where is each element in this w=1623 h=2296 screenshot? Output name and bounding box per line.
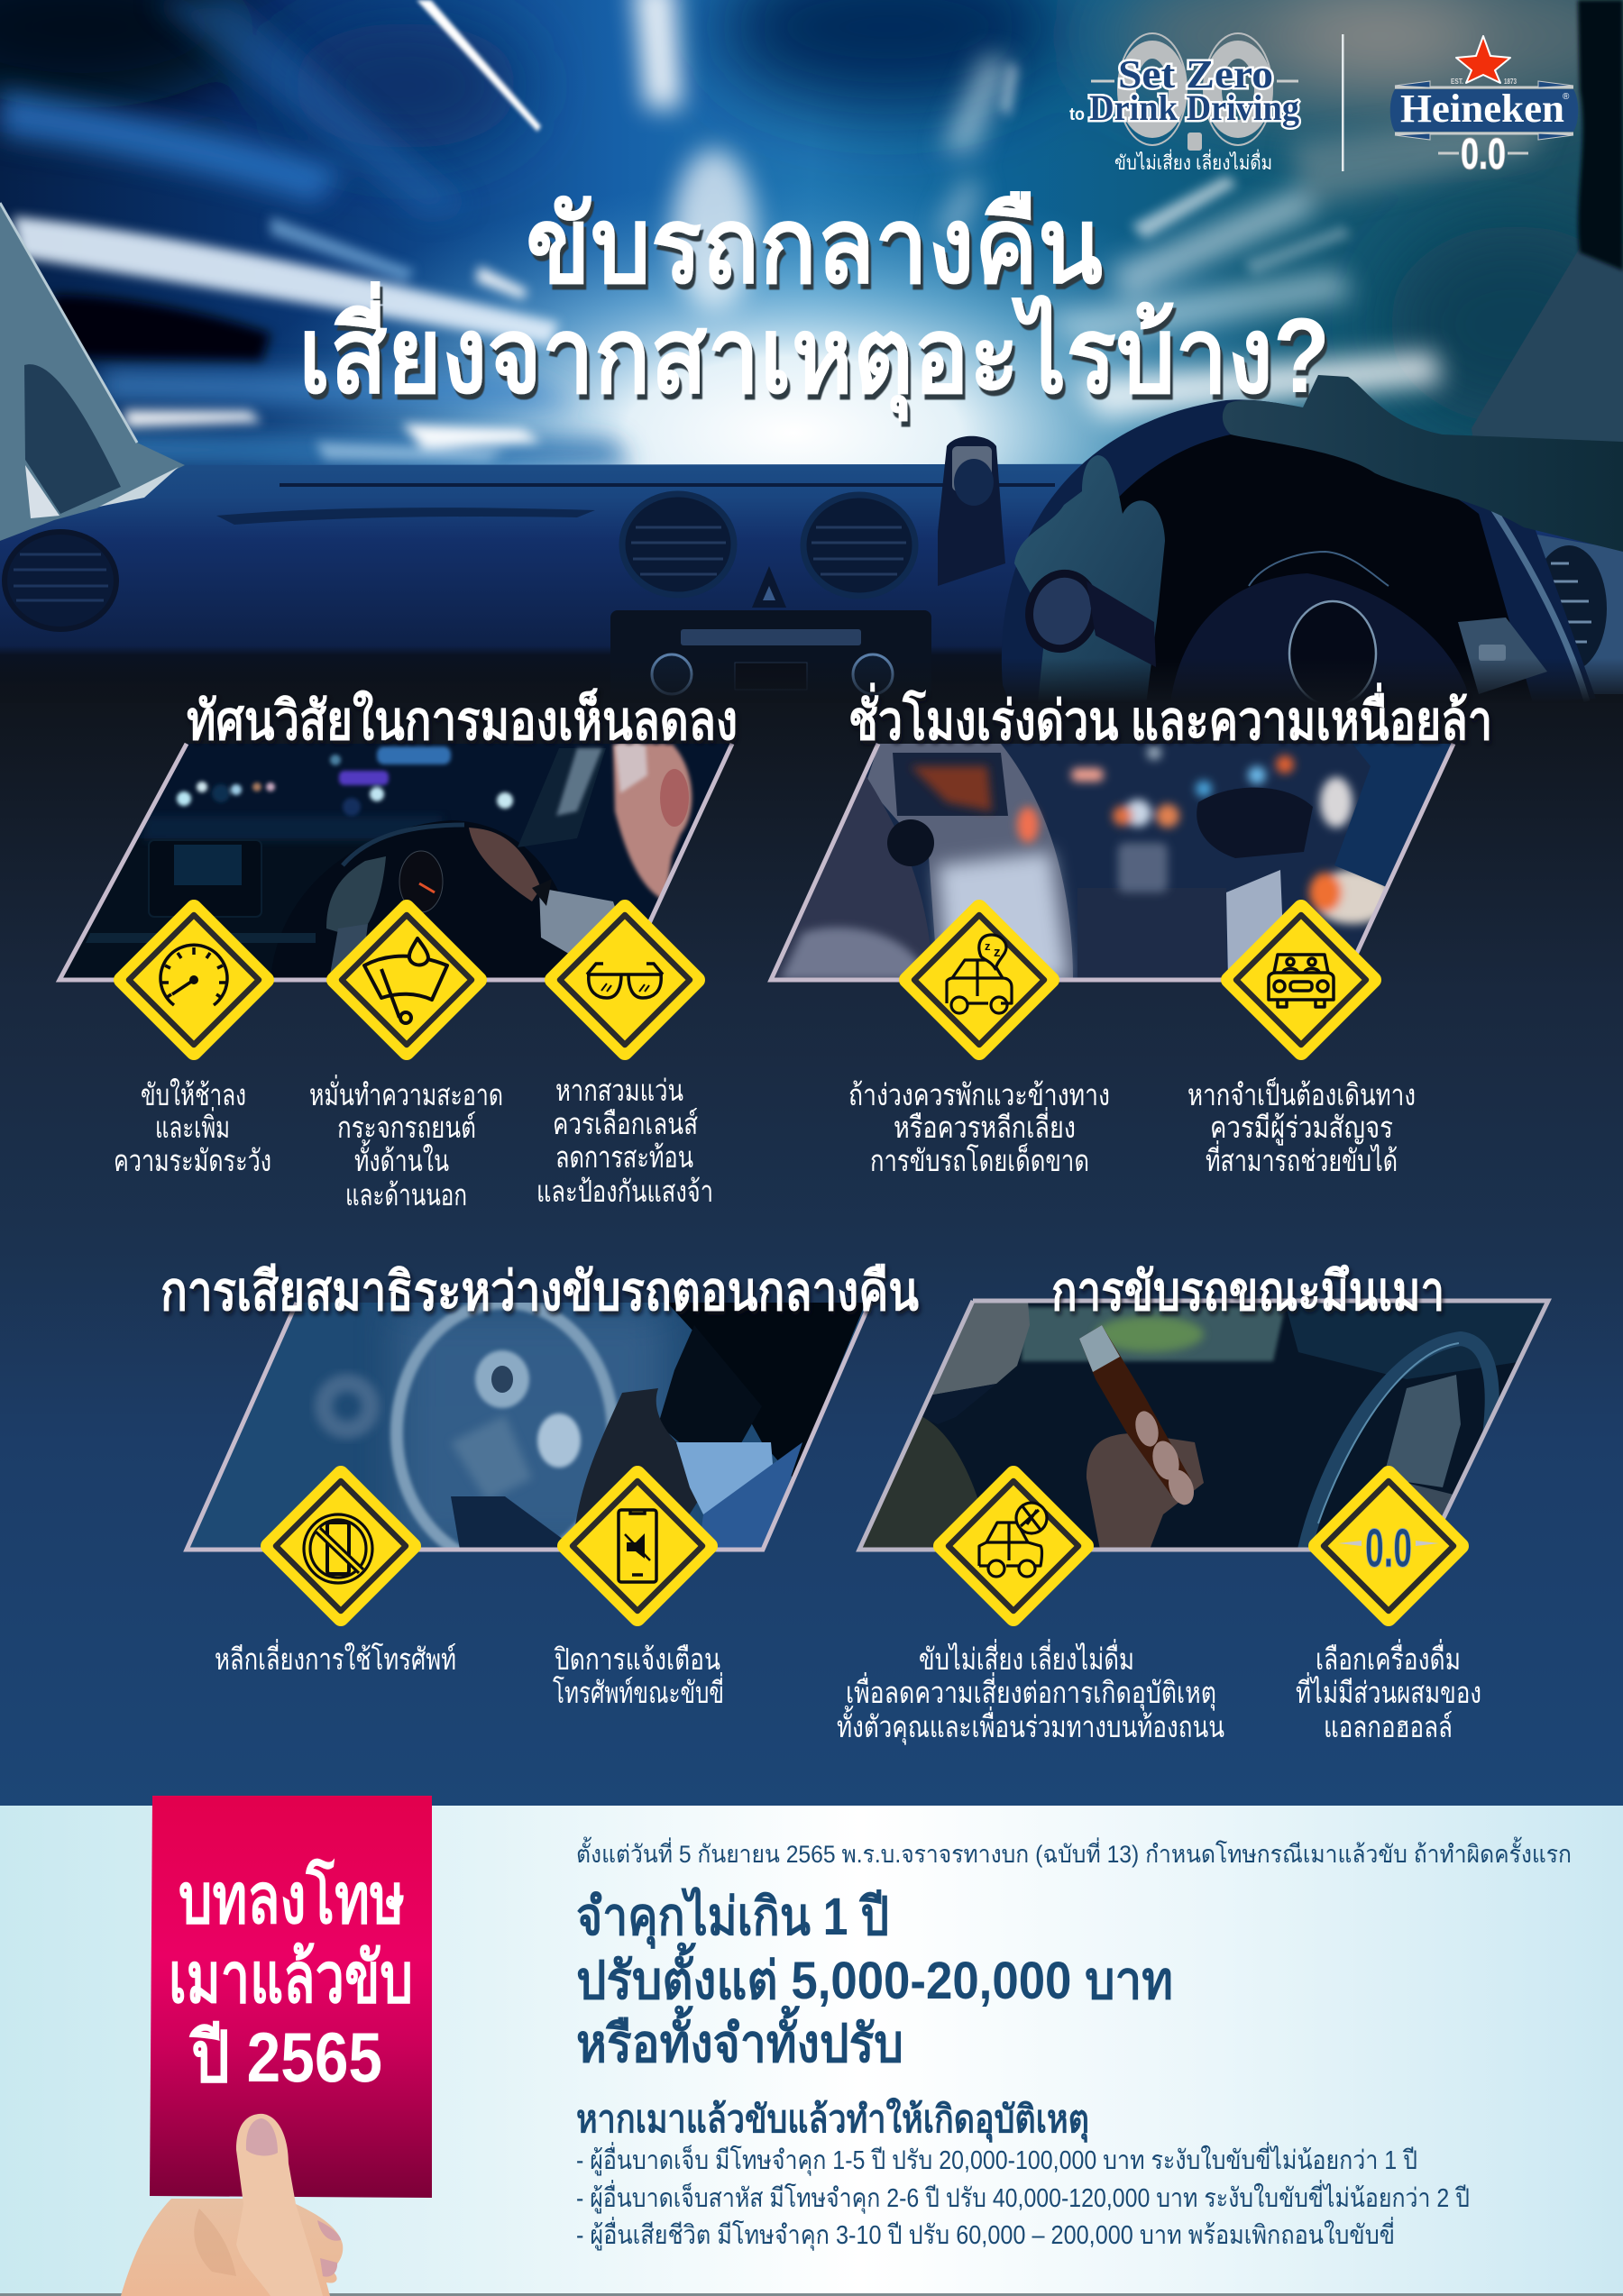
panel 4 photo: drunk driving — [859, 1301, 1548, 1550]
captions: rest: ถ้าง่วงควรพักแวะข้างทาง — [848, 1078, 1110, 1111]
panel 2 photo: rush hour traffic — [771, 744, 1453, 983]
main title: เสี่ยงจากสาเหตุอะไรบ้าง? — [298, 281, 1330, 422]
accident penalties list: - ผู้อื่นบาดเจ็บสาหัส มีโทษจำคุก 2-6 ปี ปรับ 40,000-120,000 บาท ระงับใบขับขี่ไม่น้อยกว่า 2 ปี — [576, 2180, 1470, 2214]
penalty card: บทลงโทษ — [179, 1857, 405, 1938]
logo divider — [1342, 34, 1343, 171]
captions: rest — [848, 1078, 1110, 1177]
captions: wiper — [309, 1075, 503, 1212]
accident penalties list — [576, 2142, 1470, 2251]
hazard button — [752, 566, 786, 608]
logo: Set Zero to Drink Driving: Set Zero — [1118, 52, 1273, 96]
section heading: distraction: การเสียสมาธิระหว่างขับรถตอนกลางคืน — [160, 1261, 919, 1322]
captions: zero alcohol: ที่ไม่มีส่วนผสมของ — [1296, 1672, 1481, 1709]
captions: silence notifications — [553, 1642, 724, 1709]
captions: wiper: ทั้งด้านใน — [354, 1139, 449, 1177]
icon: no phone sign — [269, 1474, 413, 1618]
captions: zero alcohol: แอลกอฮอลล์ — [1324, 1710, 1453, 1743]
icon: glasses sign — [553, 908, 697, 1052]
panel 1 photo: reduced visibility — [54, 744, 732, 983]
left A-pillar — [0, 203, 185, 541]
air vents — [5, 532, 116, 629]
logo: Set Zero to Drink Driving: Drink Driving — [1089, 87, 1299, 128]
icon: sleepy car sign — [907, 908, 1051, 1052]
captions: don't drink: ขับไม่เสี่ยง เลี่ยงไม่ดื่ม — [919, 1639, 1134, 1676]
logo: Heineken 0.0: Heineken — [1400, 87, 1564, 131]
icon: sleepy car sign: z — [994, 945, 1001, 960]
captions: rest: การขับรถโดยเด็ดขาด — [870, 1143, 1089, 1177]
main penalties — [576, 1887, 1173, 2073]
section heading: drunk driving: การขับรถขณะมึนเมา — [1051, 1261, 1444, 1322]
penalty card: ปี 2565 — [188, 2017, 382, 2097]
captions: passenger: ที่สามารถช่วยขับได้ — [1206, 1140, 1398, 1177]
driver's left hand with watch — [1014, 455, 1165, 712]
caption: avoid phone: หลีกเลี่ยงการใช้โทรศัพท์ — [215, 1639, 456, 1676]
logo: Heineken 0.0: 0.0 — [1461, 131, 1506, 178]
captions: rest: หรือควรหลีกเลี่ยง — [894, 1107, 1076, 1144]
captions: silence notifications: โทรศัพท์ขณะขับขี่ — [553, 1672, 724, 1709]
steering wheel — [1002, 399, 1596, 703]
icon: 0.0 sign: 0.0 — [1365, 1518, 1412, 1578]
captions: glasses: และป้องกันแสงจ้า — [536, 1175, 713, 1208]
dashboard — [0, 463, 1597, 666]
icon: car with passengers sign — [1229, 908, 1373, 1052]
logo: Set Zero to Drink Driving — [1069, 33, 1299, 174]
panel 3 photo: phone while driving — [187, 1303, 870, 1564]
captions: don't drink: เพื่อลดความเสี่ยงต่อการเกิดอุบัติเหตุ — [846, 1672, 1216, 1711]
captions: wiper: และด้านนอก — [345, 1178, 467, 1212]
section heading: rush hour: ชั่วโมงเร่งด่วน และความเหนื่อยล้า — [848, 682, 1492, 751]
phone holder — [938, 436, 1005, 586]
captions: speed: ความระมัดระวัง — [114, 1144, 271, 1177]
logo: Heineken 0.0: ® — [1563, 92, 1570, 102]
hero photo: night road through windshield — [0, 0, 1623, 712]
right dash and vent — [1536, 535, 1623, 694]
logo: Heineken 0.0: EST. — [1451, 78, 1463, 86]
captions: glasses: หากสวมแว่น — [555, 1074, 683, 1107]
logo: Set Zero to Drink Driving: to — [1069, 105, 1085, 124]
icon: windshield wiper sign — [335, 908, 479, 1052]
captions: wiper: หมั่นทำความสะอาด — [309, 1075, 503, 1111]
hand holding card — [121, 2114, 343, 2296]
icon: sleepy car sign: z — [985, 939, 991, 953]
main penalties: ปรับตั้งแต่ 5,000-20,000 บาท — [576, 1943, 1173, 2010]
captions: don't drink: ทั้งตัวคุณและเพื่อนร่วมทางบนท้องถนน — [837, 1706, 1224, 1745]
captions: glasses — [536, 1074, 713, 1208]
main penalties: จำคุกไม่เกิน 1 ปี — [576, 1887, 889, 1950]
captions: glasses: ควรเลือกเลนส์ — [553, 1107, 698, 1140]
section heading: visibility: ทัศนวิสัยในการมองเห็นลดลง — [187, 688, 738, 751]
icon: muted phone sign — [565, 1474, 710, 1618]
icon: speedometer sign — [122, 908, 266, 1052]
logo: Heineken 0.0 — [1390, 36, 1578, 178]
penalty card: เมาแล้วขับ — [169, 1938, 413, 2017]
icon: 0.0 sign — [1316, 1474, 1461, 1618]
captions: passenger — [1187, 1077, 1416, 1177]
main penalties: หรือทั้งจำทั้งปรับ — [576, 2006, 903, 2073]
captions: zero alcohol: เลือกเครื่องดื่ม — [1316, 1639, 1461, 1676]
captions: speed — [114, 1078, 271, 1177]
accident penalties list: - ผู้อื่นบาดเจ็บ มีโทษจำคุก 1-5 ปี ปรับ 20,000-100,000 บาท ระงับใบขับขี่ไม่น้อยกว่า 1 ปี — [576, 2142, 1417, 2176]
logo: Heineken 0.0: 1873 — [1504, 78, 1517, 86]
captions: wiper: กระจกรถยนต์ — [337, 1111, 476, 1144]
main title: ขับรถกลางคืน — [526, 187, 1103, 306]
main title — [298, 187, 1330, 422]
penalty card — [150, 1796, 432, 2198]
logo: Set Zero to Drink Driving: ขับไม่เสี่ยง เลี่ยงไม่ดื่ม — [1114, 149, 1272, 174]
icon: car and no alcohol sign — [941, 1474, 1086, 1618]
driver's right arm and hand — [1223, 375, 1623, 552]
captions: passenger: หากจำเป็นต้องเดินทาง — [1187, 1077, 1416, 1111]
captions: zero alcohol — [1296, 1639, 1481, 1743]
captions: glasses: ลดการสะท้อน — [555, 1140, 693, 1174]
page background — [0, 0, 1623, 1812]
accident penalties list: - ผู้อื่นเสียชีวิต มีโทษจำคุก 3-10 ปี ปรับ 60,000 – 200,000 บาท พร้อมเพิกถอนใบขับขี่ — [576, 2217, 1395, 2251]
captions: silence notifications: ปิดการแจ้งเตือน — [554, 1642, 720, 1676]
console radio — [610, 610, 931, 653]
captions: passenger: ควรมีผู้ร่วมสัญจร — [1210, 1111, 1393, 1146]
right pillar — [1472, 246, 1623, 442]
captions: speed: ขับให้ช้าลง — [141, 1078, 246, 1111]
captions: don't drink — [837, 1639, 1224, 1745]
penalty section background — [0, 1806, 1623, 2296]
captions: speed: และเพิ่ม — [155, 1107, 230, 1144]
accident subheading: หากเมาแล้วขับแล้วทำให้เกิดอุบัติเหตุ — [576, 2097, 1089, 2143]
